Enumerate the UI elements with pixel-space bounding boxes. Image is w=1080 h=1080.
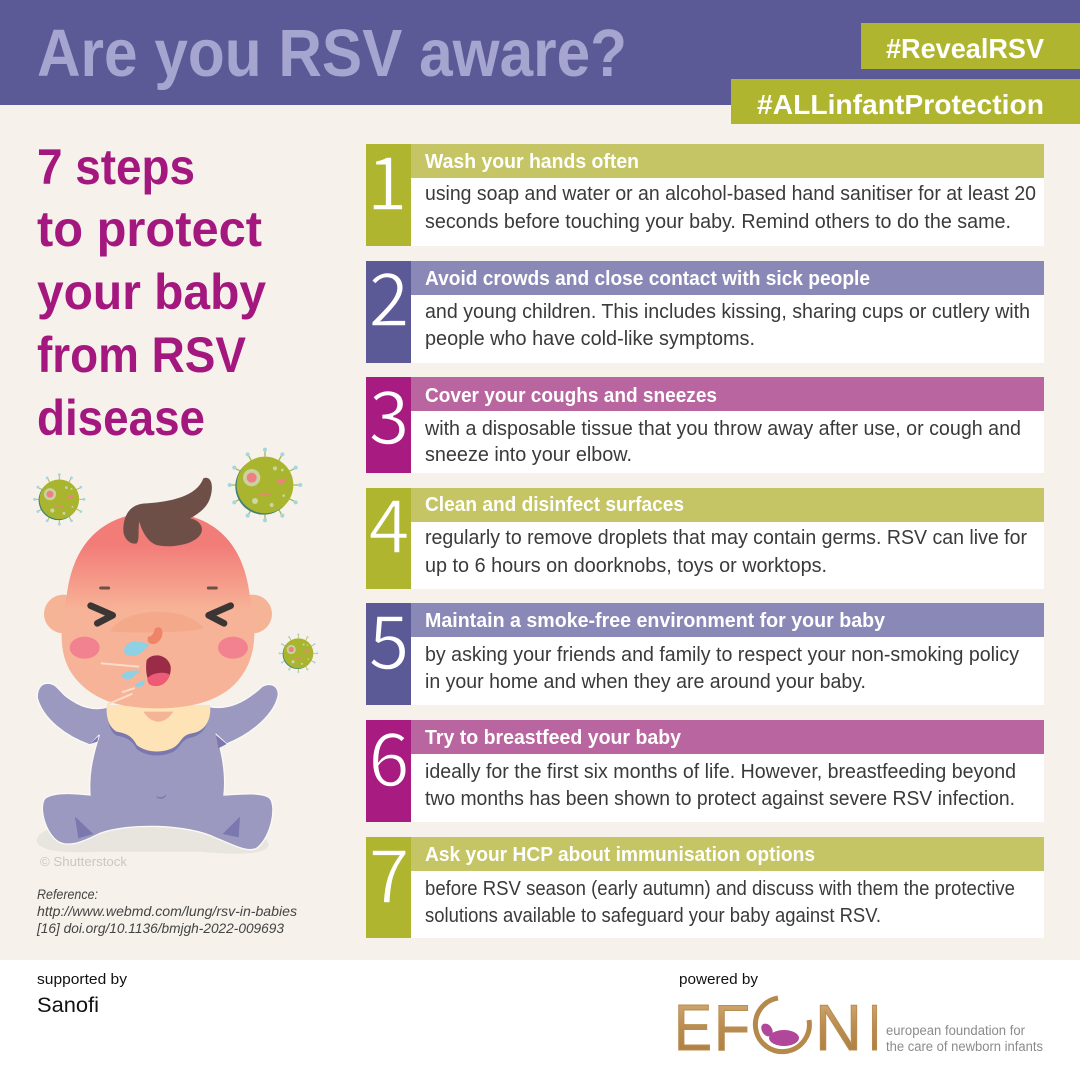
step 4: up to 6 hours on doorknobs, toys or worktops. <box>425 555 827 577</box>
step 5 <box>366 584 1044 705</box>
step 6: ideally for the first six months of life. However, breastfeeding beyond <box>425 761 1016 783</box>
step 7: 7 <box>368 818 410 925</box>
EFCNI logo: E <box>674 991 712 1064</box>
hair <box>123 478 212 546</box>
eyebrows <box>101 583 216 592</box>
body folds <box>75 735 240 838</box>
step 1: 1 <box>366 125 408 232</box>
left heading: 7 steps to protect your baby from RSV disease: disease <box>37 390 205 446</box>
step 2: Avoid crowds and close contact with sick people <box>425 268 870 290</box>
step 4: 4 <box>368 468 410 575</box>
cheeks <box>70 637 248 659</box>
supported by Sanofi: supported by <box>37 971 128 988</box>
logo tagline <box>886 1023 1043 1054</box>
hashtag: RevealRSV <box>861 23 1080 69</box>
step 2 <box>366 241 1044 363</box>
header band <box>0 0 1080 105</box>
step 7: solutions available to safeguard your baby against RSV. <box>425 905 881 927</box>
step 6 <box>366 701 1044 822</box>
step 3: 3 <box>368 359 410 466</box>
left heading: 7 steps to protect your baby from RSV disease: to protect <box>37 201 262 257</box>
supported by Sanofi <box>37 971 128 1017</box>
mouth <box>146 655 171 686</box>
step 4 <box>366 468 1044 589</box>
image credit: © Shutterstock <box>40 854 128 869</box>
supported by Sanofi: Sanofi <box>37 994 99 1017</box>
icon: virus top left <box>33 473 85 525</box>
eyes <box>91 606 231 623</box>
sneeze lines <box>102 663 138 704</box>
logo mark: C with baby <box>755 998 809 1052</box>
step 5: by asking your friends and family to respect your non-smoking policy <box>425 644 1019 666</box>
step 2: people who have cold-like symptoms. <box>425 328 755 350</box>
EFCNI logo <box>674 991 1043 1064</box>
nose <box>148 627 162 644</box>
head <box>62 512 254 708</box>
step 4: regularly to remove droplets that may contain germs. RSV can live for <box>425 527 1027 549</box>
reference <box>36 887 297 936</box>
step 5: 5 <box>368 584 410 691</box>
snot drops <box>122 641 150 687</box>
step 6: two months has been shown to protect against severe RSV infection. <box>425 788 1015 810</box>
powered by: powered by <box>679 971 758 988</box>
step 7 <box>366 818 1044 938</box>
baby body <box>37 683 278 850</box>
illustration: sneezing baby with viruses <box>33 448 318 854</box>
left heading: 7 steps to protect your baby from RSV disease: from RSV <box>37 327 247 383</box>
nose shade <box>110 612 203 632</box>
step 6: 6 <box>368 701 410 808</box>
step 3 <box>366 359 1044 473</box>
tongue <box>147 673 170 686</box>
EFCNI logo: N <box>815 991 862 1064</box>
step 3: with a disposable tissue that you throw away after use, or cough and <box>424 418 1021 440</box>
step 6: Try to breastfeed your baby <box>425 727 682 749</box>
step 2: 2 <box>368 241 410 348</box>
step 2: and young children. This includes kissing, sharing cups or cutlery with <box>425 301 1030 323</box>
logo tagline: the care of newborn infants <box>886 1039 1043 1054</box>
step 7: Ask your HCP about immunisation options <box>425 844 815 866</box>
title: Are you RSV aware? <box>37 16 627 91</box>
logo tagline: european foundation for <box>886 1023 1025 1038</box>
bib <box>107 705 210 751</box>
icon: virus right <box>279 634 318 673</box>
ear right <box>233 595 272 633</box>
reference: Reference: <box>37 887 98 902</box>
step 3: Cover your coughs and sneezes <box>425 385 717 407</box>
left heading: 7 steps to protect your baby from RSV disease <box>37 139 266 446</box>
step 7: before RSV season (early autumn) and discuss with them the protective <box>425 878 1015 900</box>
left heading: 7 steps to protect your baby from RSV disease: 7 steps <box>37 139 195 195</box>
step 1 <box>366 125 1044 246</box>
hashtag: RevealRSV: #RevealRSV <box>886 33 1044 64</box>
EFCNI logo: I <box>868 991 881 1064</box>
step 1: seconds before touching your baby. Remind others to do the same. <box>425 211 1011 233</box>
footer background <box>0 960 1080 1080</box>
bib shadow <box>108 710 209 755</box>
ground shadow <box>37 825 269 854</box>
step 5: Maintain a smoke-free environment for your baby <box>425 610 886 632</box>
hashtag: ALLinfantProtection: #ALLinfantProtection <box>757 89 1044 120</box>
step 5: in your home and when they are around your baby. <box>425 671 866 693</box>
icon: virus top right <box>228 448 302 522</box>
step 3: sneeze into your elbow. <box>425 444 632 466</box>
step 4: Clean and disinfect surfaces <box>425 494 684 516</box>
ear left <box>44 595 83 633</box>
hashtag: ALLinfantProtection <box>731 79 1080 124</box>
step 1: Wash your hands often <box>425 151 639 173</box>
step 1: using soap and water or an alcohol-based hand sanitiser for at least 20 <box>425 183 1036 205</box>
neck <box>143 712 173 722</box>
reference: http://www.webmd.com/lung/rsv-in-babies <box>37 904 297 919</box>
EFCNI logo: F <box>714 991 750 1064</box>
reference: [16] doi.org/10.1136/bmjgh-2022-009693 <box>36 921 284 936</box>
left heading: 7 steps to protect your baby from RSV disease: your baby <box>37 264 266 320</box>
